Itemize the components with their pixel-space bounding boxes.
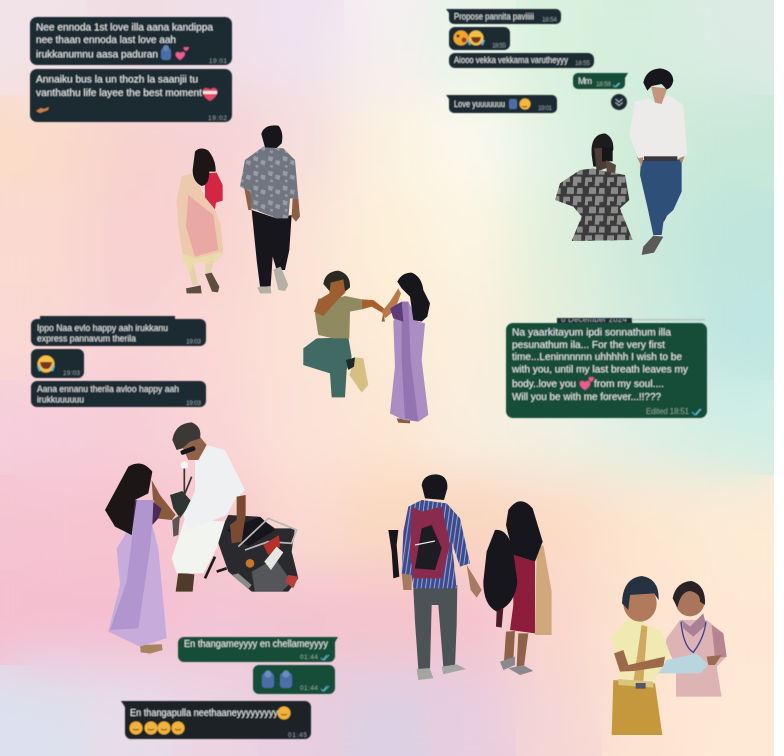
bubble: second message	[30, 69, 232, 122]
illustrated couple: boy covering face, woman in purple saree	[303, 271, 430, 423]
bubble: Propose pannita	[446, 9, 561, 24]
bubble: En thangameyyyy	[178, 637, 338, 662]
selfie woman in dark printed dress	[555, 133, 633, 241]
bubble: Mm: 18:58	[596, 81, 611, 88]
bubble: Mm	[573, 73, 628, 89]
chat: green proposal message, middle right	[506, 315, 707, 418]
bubble: laughing emoji	[31, 349, 84, 378]
date chip, clipped: 6 December 2024	[561, 315, 628, 324]
bubble: En thangameyyyy: En thangameyyyy en chellameyyyy	[184, 638, 329, 650]
chat: Propose conversation, top centre	[446, 9, 628, 113]
bubble: Ippo Naa: 19:03	[186, 338, 201, 346]
bubble: first message: Nee ennoda 1st love illa aana kandippa	[36, 22, 213, 34]
bubble: Mm: Mm	[578, 76, 592, 86]
bubble: Propose pannita: Propose pannita paviiiii	[454, 12, 534, 22]
bubble: two emoji	[449, 27, 510, 50]
bubble: En thangapulla: En thangapulla neethaaneyyyyyyyyy	[130, 707, 279, 719]
bubble: Love yuuu: Love yuuuuuuu	[454, 99, 505, 109]
bubble: Aana ennanu: Aana ennanu therila avloo happy aah	[37, 384, 179, 394]
bubble: two emoji: 18:55	[492, 42, 506, 50]
chat: green proposal message, middle right: body..love you	[512, 378, 576, 390]
bubble: couple emoji	[253, 665, 335, 694]
chat: green proposal message, middle right: pesunathum ila... For the very first	[512, 339, 665, 351]
chat: green proposal message, middle right: with you, until my last breath leaves my	[511, 364, 689, 376]
bubble: first message: irukkanumnu aasa paduran	[36, 48, 158, 60]
bubble: Ippo Naa	[31, 319, 206, 346]
bubble: first message: 19:01	[209, 58, 227, 65]
bubble: Aiooo: Aiooo vekka vekkama varutheyyy	[454, 55, 568, 65]
chat: green proposal message, middle right: Edited 18:51	[646, 407, 690, 416]
bubble: first message: nee thaan ennoda last love aah	[36, 34, 176, 46]
bubble: second message: Annaiku bus la un thozh la saanjii tu	[36, 74, 198, 86]
bubble: Aiooo	[449, 53, 594, 68]
woman in lilac saree, seen from behind	[105, 463, 176, 654]
chat: green proposal message, middle right: Na yaarkitayum ipdi sonnathum illa	[512, 326, 671, 338]
bubble: second message: vanthathu life layee the best moment	[36, 87, 202, 99]
chat: incoming love messages, top left	[30, 17, 232, 122]
chat: green proposal message, middle right: from my soul....	[594, 378, 664, 390]
childhood photo: boy and girl in school uniform	[609, 576, 727, 735]
couple walking: red blouse and grey shirt	[177, 125, 300, 293]
bubble: Love yuuu: 19:01	[538, 105, 552, 112]
bubble: couple emoji: 01:44	[300, 685, 318, 692]
couple with backpacks walking away	[388, 474, 552, 680]
bubble: En thangapulla	[121, 701, 311, 739]
chat: happiness messages, middle left	[31, 316, 206, 407]
chat: bottom messages	[121, 637, 338, 739]
date chip, clipped	[556, 317, 706, 324]
bubble: Ippo Naa: express pannavum therila	[37, 334, 136, 344]
bubble: laughing emoji: 19:03	[63, 370, 80, 377]
bubble: first message	[30, 17, 232, 65]
bubble: Love yuuu	[446, 95, 557, 113]
bubble: Aana ennanu: 19:03	[186, 400, 201, 407]
bubble: Propose pannita: 18:54	[542, 16, 557, 24]
scroll down button	[611, 94, 627, 110]
bubble: second message: 19:02	[208, 115, 227, 122]
man in white sitting on motorbike	[170, 422, 298, 592]
chat: green proposal message, middle right: Will you be with me forever...!!???	[512, 391, 661, 403]
bubble: En thangameyyyy: 01:44	[300, 654, 318, 661]
bubble: Aiooo: 18:55	[575, 60, 590, 67]
chat: green proposal message, middle right: time...Leninnnnnn uhhhhh I wish to be	[512, 351, 682, 363]
bubble: Aana ennanu	[31, 381, 206, 407]
man in white shirt and blue jeans	[629, 68, 687, 255]
bubble: Ippo Naa: Ippo Naa evlo happy aah irukkanu	[37, 323, 168, 333]
bubble: En thangapulla: 01:45	[288, 732, 307, 739]
bubble: Aana ennanu: irukkuuuuuu	[37, 394, 84, 404]
